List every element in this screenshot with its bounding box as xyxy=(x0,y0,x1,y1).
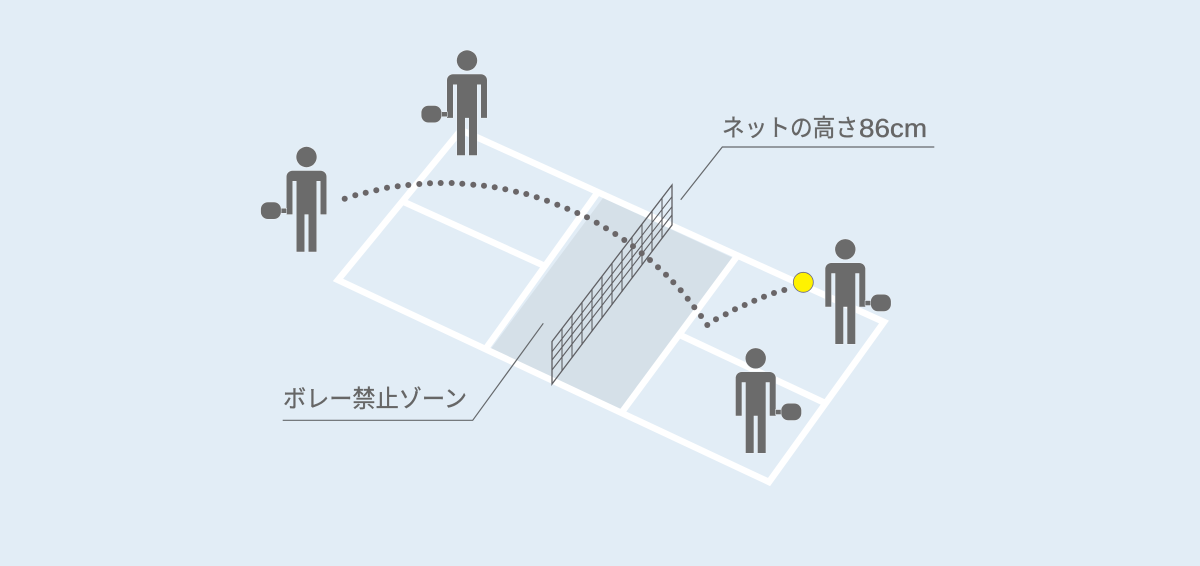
callout: net height: ネットの高さ xyxy=(722,115,858,142)
ball xyxy=(793,272,813,292)
net xyxy=(552,185,672,384)
ball trajectory xyxy=(342,180,787,328)
player: bottom right xyxy=(736,348,801,453)
player: top left xyxy=(421,50,487,155)
callout: volley-free zone xyxy=(283,323,543,420)
callout: net height xyxy=(681,113,934,200)
player: right xyxy=(825,239,891,344)
volley-free zone xyxy=(490,198,733,409)
callout: net height: 86cm xyxy=(859,113,927,143)
callout: volley-free zone: ボレー禁止ゾーン xyxy=(283,386,467,413)
court lines xyxy=(338,130,884,482)
player: far left xyxy=(261,147,326,252)
